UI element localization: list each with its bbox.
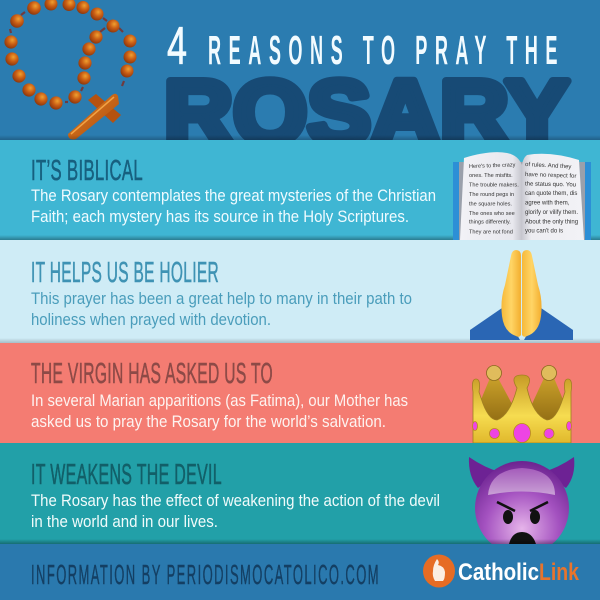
icon: open book: The round pegs in <box>469 192 514 198</box>
text: biblical description: Faith; each mystery has its source in the Holy Scriptures. <box>31 208 409 226</box>
panel: footer <box>0 544 600 600</box>
icon: open book: the square holes. <box>469 202 512 208</box>
icon: open book: things differently. <box>469 220 511 226</box>
text: devil description: in the world and in our lives. <box>31 513 218 531</box>
icon: open book: have no respect for <box>525 172 576 180</box>
icon: open book: Here's to the crazy <box>469 162 516 170</box>
text: biblical description: The Rosary contemplates the great mysteries of the Christian <box>31 187 436 205</box>
logo: catholic link <box>423 554 580 588</box>
title: rosary: ROSARY <box>164 63 569 163</box>
header bottom shadow <box>0 135 600 140</box>
text: virgin description: asked us to pray the Rosary for the world’s salvation. <box>31 413 386 431</box>
icon: rosary beads and cross <box>4 0 137 139</box>
icon: open book: The ones who see <box>469 211 515 217</box>
heading: it's biblical: IT’S BIBLICAL <box>31 155 143 187</box>
icon: crown <box>472 366 572 443</box>
icon: open book: agree with them, <box>525 200 570 206</box>
heading: it weakens the devil: IT WEAKENS THE DEVIL <box>31 459 222 491</box>
icon: open book <box>453 152 591 240</box>
header background <box>0 0 600 140</box>
title: 4 reasons to pray the: 4 <box>167 17 187 76</box>
text: devil description: The Rosary has the effect of weakening the action of the devil <box>31 492 440 510</box>
text: biblical description <box>31 187 436 226</box>
text: devil description <box>31 492 440 531</box>
icon: open book: The trouble makers. <box>469 182 519 188</box>
heading: the virgin has asked us to: THE VIRGIN HAS ASKED US TO <box>31 358 273 390</box>
panel: the virgin has asked us to <box>0 343 600 443</box>
heading: it helps us be holier: IT HELPS US BE HOLIER <box>31 257 219 289</box>
icon: open book: can quote them, dis <box>525 191 577 197</box>
icon: open book: glorify or vilify them. <box>525 210 578 216</box>
icon: open book: About the only thing <box>525 220 578 226</box>
icon: open book: you can't do is <box>525 228 563 234</box>
logo: catholic link: Catholic <box>458 559 539 586</box>
panel: it's biblical <box>0 140 600 240</box>
text: virgin description: In several Marian apparitions (as Fatima), our Mother has <box>31 392 408 410</box>
text: holier description <box>31 290 412 329</box>
icon: praying hands <box>470 250 573 340</box>
icon: open book: the status quo. You <box>525 182 576 188</box>
icon: open book: of rules. And they <box>525 162 572 170</box>
logo: catholic link: Link <box>539 559 580 586</box>
text: holier description: holiness when prayed with devotion. <box>31 311 271 329</box>
icon: open book: They are not fond <box>469 230 513 236</box>
icon: open book: ones. The misfits. <box>469 173 513 179</box>
panel: it helps us be holier <box>0 240 600 343</box>
title: 4 reasons to pray the <box>167 17 565 76</box>
text: virgin description <box>31 392 408 431</box>
text: holier description: This prayer has been a great help to many in their path to <box>31 290 412 308</box>
panel: it weakens the devil <box>0 443 600 555</box>
icon: purple devil face <box>469 457 574 555</box>
